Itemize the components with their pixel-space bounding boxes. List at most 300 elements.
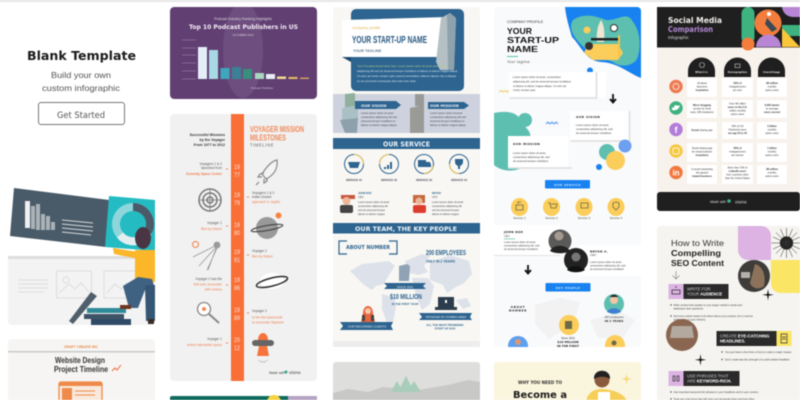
stat: 200 employees: ONLY IN 2 YEARS	[426, 258, 455, 264]
tagline: YOUR TAGLINE	[353, 49, 382, 53]
ribbon: promising	[419, 313, 472, 320]
bullets: keywords: Use important keyword-rich phrases in your headlines and in your content.	[674, 390, 759, 394]
timeline markers	[226, 169, 249, 343]
panel: green card peek	[170, 395, 317, 400]
heading: website design: Project Timeline	[54, 365, 108, 374]
icon: sparkle top	[762, 289, 774, 301]
label: use phrases keyword-rich: ARE KEYWORD-RICH.	[687, 378, 731, 383]
milestone labels: Voyager 1	[207, 221, 222, 225]
button: our service: OUR SERVICE	[554, 183, 581, 187]
milestone labels: Voyager 2	[252, 249, 267, 253]
service labels: Service 2	[545, 216, 558, 220]
service labels: SERVICE 02	[381, 178, 397, 182]
text card: our vision: Lorem ipsum dolor sit amet,	[576, 123, 609, 127]
service labels	[513, 216, 623, 220]
label: write for your audience: YOUR AUDIENCE	[687, 291, 722, 296]
team text: consectetur adipiscing elit	[432, 204, 462, 208]
table text: Social sharing app	[692, 147, 713, 150]
row cells	[687, 78, 787, 184]
service glyphs	[516, 202, 619, 210]
panel: company profile with blobs	[494, 7, 641, 357]
heading: about number: ABOUT	[511, 305, 526, 309]
table text: are age 25 to 34	[728, 132, 747, 135]
person card: bryan: CMO	[590, 253, 596, 257]
table text: 1 billion	[767, 147, 777, 150]
column headers: Users/Usage	[763, 70, 780, 74]
icon: starburst	[772, 228, 800, 258]
bar chart	[182, 40, 309, 90]
icon: magnifier	[198, 302, 219, 323]
arrow: down second	[525, 265, 531, 274]
stat: since: Since 2011	[561, 336, 575, 340]
table text: Instagrammers	[729, 150, 747, 154]
table text: LinkedIn users	[729, 170, 747, 173]
label: create eye-catching headlines: CREATE EYE-CATCHING	[720, 334, 769, 338]
credit: made with visme	[269, 370, 301, 375]
timeline years: 77	[234, 173, 241, 179]
label: write for your audience: WRITE FOR	[687, 286, 710, 292]
subheading: timeline: TIMELINE	[250, 142, 274, 148]
intro paragraph: ex ea commodo consequat duis aute irure dolor	[357, 79, 416, 83]
intro paragraph: Ut enim ad minim veniam quis nostrud exercitation ullamco laboris nisi ut aliquip	[357, 74, 456, 78]
milestone labels: Voyager 2	[252, 309, 267, 313]
table text: every second	[764, 111, 780, 114]
button: key people: KEY PEOPLE	[556, 286, 580, 290]
vision text: consectetur adipiscing elit sed	[361, 115, 397, 119]
text card: our mission	[508, 136, 572, 168]
icon: satellite	[192, 242, 220, 270]
mission text: consectetur adipiscing elit sed	[430, 115, 466, 119]
team text: BRYAN	[432, 191, 441, 195]
table text: service for short	[693, 108, 711, 110]
subheading: infographic: Infographic	[668, 35, 689, 40]
heading: compelling seo content: SEO Content	[671, 259, 724, 268]
blue blob	[565, 7, 641, 78]
table text: Social sharing app	[691, 129, 713, 132]
milestone labels: flies by Saturn	[201, 227, 222, 231]
panel: how to write seo content	[657, 226, 800, 400]
text card: our mission: do eiusmod tempor incididunt	[513, 159, 548, 163]
table text: Facebook users	[729, 128, 747, 132]
bullets: audience: addresses their questions.	[674, 306, 704, 310]
milestone labels: enters interstellar space	[187, 343, 222, 347]
milestone labels: with Uranus	[205, 288, 222, 292]
bullets: headlines: Don't underrate the strength of a well-crafted headline!	[725, 358, 790, 362]
team text: sed do eiusmod tempor	[432, 208, 459, 212]
milestone labels: Voyagers 1 & 2	[252, 191, 275, 195]
label: company profile: COMPANY PROFILE	[507, 20, 544, 24]
heading: comparison: Comparison	[668, 25, 713, 34]
table text: are women	[731, 154, 744, 157]
icon: woman	[361, 306, 375, 322]
icon: skyscraper	[436, 13, 456, 70]
footer band	[333, 341, 480, 347]
credit: made with visme: Made with	[269, 371, 285, 375]
table text: More than 70% of	[728, 166, 748, 170]
illustration: person lifting chart panel	[8, 188, 155, 325]
person card: bryan: BRYAN A.	[590, 250, 608, 254]
shape: lilac	[738, 226, 771, 260]
panel: social media comparison	[657, 7, 800, 211]
timeline years: 19	[234, 250, 241, 256]
bullets: audience: of the value to your industry.	[674, 318, 706, 322]
button: key people	[546, 283, 590, 292]
wave: blue	[546, 122, 558, 124]
table text: than the United States	[725, 177, 751, 180]
person card: bryan: Lorem ipsum dolor sit amet,	[590, 260, 622, 264]
tree line	[333, 380, 480, 400]
intro text: by the Voyager	[200, 138, 226, 142]
heading: your start-up name	[507, 26, 560, 54]
band: our service: OUR SERVICE	[383, 140, 430, 148]
table text: All about	[697, 82, 707, 85]
table text: discovery	[697, 86, 708, 88]
bullets: headlines	[721, 350, 792, 362]
label: craft create: CRAFT CREATE INC	[64, 345, 98, 349]
subtitle	[42, 70, 121, 93]
panel: voyager mission timeline	[170, 114, 317, 381]
timeline years: 12	[234, 346, 241, 352]
photo: round laptop	[666, 319, 698, 351]
timeline years: 19	[234, 223, 241, 229]
band: our team: OUR TEAM, THE KEY PEOPLE	[355, 225, 457, 233]
heading: voyager mission milestones	[250, 124, 304, 142]
milestone labels: Kennedy Space Center	[186, 172, 223, 176]
label: write for your audience	[668, 284, 728, 299]
circles cluster	[596, 140, 632, 170]
timeline years: 80	[234, 231, 241, 237]
dot	[587, 68, 593, 74]
heading: compelling seo content	[671, 249, 724, 268]
bullets: headlines: You just have a few lines of text to make a major impact.	[725, 350, 792, 354]
team text: CEO	[358, 195, 364, 199]
person card: john doe: consectetur adipiscing elit, sed	[504, 244, 540, 248]
heading: why you need to: WHY YOU NEED TO	[518, 380, 563, 385]
label: use phrases keyword-rich: USE PHRASES THAT	[687, 374, 729, 378]
panel: website design project timeline card	[8, 339, 155, 400]
person card: john doe	[494, 230, 560, 256]
heading: blank template: Blank Template	[27, 48, 136, 63]
icon: concentric target	[199, 189, 221, 211]
mission text	[430, 111, 466, 127]
intro text: From 1977 to 2012	[194, 143, 225, 147]
team text: JOHN DOE	[358, 191, 372, 195]
icon: building on map	[399, 264, 410, 281]
heading: about number	[339, 241, 397, 254]
table text: monthly	[768, 150, 777, 154]
table text: from countries other	[726, 174, 749, 176]
timeline years	[234, 165, 241, 352]
small label: Podcast Industry Ranking Highlights	[214, 17, 272, 21]
band: our team	[333, 223, 480, 234]
panel: become a card	[494, 362, 641, 400]
team text: labore et dolore magna	[358, 212, 385, 216]
table text: active users	[765, 175, 779, 178]
icon: rocket	[256, 160, 277, 185]
eyebrow text: company profile	[352, 25, 381, 30]
heading: voyager mission milestones: MILESTONES	[250, 132, 286, 142]
icons: social networks: in	[672, 168, 680, 178]
text card: intro: minim veniam quis.	[513, 88, 536, 92]
bullets: audience: Not every article needs to be direct about your product, but it must be	[674, 314, 753, 318]
orange timeline bar	[231, 114, 244, 381]
heading: your start-up name: NAME	[507, 44, 539, 54]
milestone labels: first ever encounter	[194, 282, 223, 286]
icons: social networks: f	[674, 125, 678, 135]
label: create eye-catching headlines	[716, 331, 792, 346]
blob: building yellow	[559, 315, 579, 335]
icon: ufo	[252, 333, 274, 362]
team text	[358, 191, 464, 216]
milestone labels: to encounter Neptune	[252, 320, 284, 324]
icon: laptop	[435, 297, 457, 310]
person card: bryan: do eiusmod tempor incididunt	[590, 267, 624, 271]
intro paragraph: adipiscing elit sed do eiusmod tempor incididunt ut labore et dolore magna aliqua	[357, 69, 458, 73]
service labels: SERVICE 03	[416, 178, 432, 182]
text card: intro	[509, 72, 606, 98]
milestone labels: Voyager 1	[207, 337, 222, 341]
table text: 3 billion	[767, 125, 777, 128]
stat caption: IN THE FIRST YEAR	[392, 302, 418, 306]
dark footer	[657, 192, 800, 211]
panel: blank template card	[8, 50, 156, 326]
table text: 34% of US	[732, 125, 744, 128]
intro text: Successful Missions	[190, 133, 225, 137]
timeline years: 20	[234, 338, 241, 344]
service labels: Service 4	[610, 216, 623, 220]
promising caption: START UP 2015	[435, 326, 456, 330]
service labels: Service 1	[513, 216, 526, 220]
button: our service	[545, 180, 590, 188]
arrow: down	[672, 271, 680, 279]
heading: top 10 podcast publishers: Top 10 Podcast Publishers in US	[189, 24, 298, 31]
credit: made with visme: visme	[735, 200, 747, 204]
table text: site geared	[696, 172, 709, 174]
illustration: rocket and tools	[584, 20, 623, 60]
team text: CFO	[432, 195, 437, 199]
icon: stacked building	[340, 93, 358, 133]
milestone labels	[186, 162, 284, 347]
blob: blue person	[508, 336, 528, 356]
stat: employees	[605, 315, 624, 323]
band: our service	[333, 138, 480, 149]
heading: your start-up name: YOUR	[507, 26, 532, 36]
table text: inspiration	[696, 154, 709, 157]
text card: our vision: do eiusmod tempor incididunt	[576, 131, 611, 135]
table text: Micro blogging	[693, 104, 711, 107]
panel: forest template card	[333, 362, 480, 400]
icon: white ringed planet	[256, 273, 288, 290]
table text: users in the U.S.	[728, 106, 748, 109]
team text: Lorem ipsum dolor sit amet	[432, 200, 464, 204]
team portraits	[340, 195, 426, 213]
table text: 50% of	[733, 82, 742, 85]
ribbon: since	[384, 283, 426, 289]
vision text: eiusmod tempor incididunt ut	[361, 119, 396, 123]
geometric shapes	[742, 7, 800, 50]
table text: A social networking	[691, 168, 713, 171]
stat: employees: 200 employees	[605, 315, 624, 319]
promising caption: ALL THE MOST PROMISING	[426, 323, 464, 327]
milestone labels: is the first spacecraft	[252, 316, 282, 320]
mission text: eiusmod tempor incididunt ut	[430, 119, 465, 123]
arrow label: our vision	[355, 101, 401, 109]
table text: Instagrammers	[729, 86, 747, 88]
bar chart: Podcast Publisher	[251, 86, 273, 90]
team text: Lorem ipsum dolor sit amet	[358, 200, 390, 204]
stat: employees: IN 2 YEARS	[605, 319, 623, 323]
timeline years: 19	[234, 193, 241, 199]
column headers: What it is	[695, 70, 708, 74]
icon: gray tower	[410, 94, 424, 133]
text card: our vision	[570, 111, 630, 141]
icon: ringed planet with moon	[251, 212, 283, 239]
arrow label: our mission: OUR MISSION	[430, 103, 459, 108]
table text: for visual products	[692, 150, 713, 154]
table text: on average	[766, 108, 779, 110]
label: use phrases keyword-rich	[668, 371, 740, 386]
blob: yellow award	[605, 335, 625, 357]
icon: trees	[391, 376, 421, 392]
table text: 2B million	[766, 82, 778, 85]
subtitle: Build your own	[51, 70, 111, 80]
text card: our vision: consectetur adipiscing elit, sed	[576, 127, 613, 131]
wave	[499, 90, 511, 92]
bullets: audience: Write content that speaks to your target market's needs and	[674, 303, 743, 307]
stat: since: IN THE FIRST	[557, 344, 580, 348]
icon: sparkle	[622, 374, 632, 384]
heading: website design: Website Design	[55, 356, 105, 365]
teal blob	[571, 16, 640, 66]
white title banner	[342, 17, 447, 57]
blue header panel	[351, 9, 464, 91]
milestone labels: flies by Saturn	[252, 254, 273, 258]
text card: our vision: OUR VISION	[576, 115, 600, 119]
text card: intro: adipiscing elit, sed do eiusmod tempor incididunt	[513, 80, 571, 84]
vision text: labore et dolore magna aliqua	[361, 123, 397, 127]
text card: our mission: consectetur adipiscing elit, sed	[513, 155, 550, 159]
photo: round top	[738, 260, 770, 292]
photo: smiling person	[586, 371, 627, 400]
button: get started: Get Started	[57, 111, 105, 121]
table text: inspiration	[696, 89, 709, 92]
service labels: SERVICE 04	[451, 178, 467, 182]
tagline: Your tagline	[507, 60, 530, 64]
subtitle: custom infographic	[42, 83, 121, 93]
vision text: Lorem ipsum dolor sit amet	[361, 111, 394, 115]
date label: OCTOBER 2019	[233, 33, 254, 37]
timeline years: 19	[234, 308, 241, 314]
column headers: Demographics	[728, 70, 748, 74]
table text: are men	[733, 89, 743, 92]
table text: 50% of	[733, 147, 742, 150]
milestone labels: Voyagers 1 & 2	[200, 162, 222, 166]
milestone labels: launched from	[201, 166, 222, 170]
person card: john doe: JOHN DOE	[503, 230, 523, 234]
shape: yellow	[771, 260, 800, 293]
milestone labels: Voyager 2 has the	[195, 277, 222, 281]
heading: website design	[54, 356, 108, 374]
timeline years: 89	[234, 316, 241, 322]
team text: sed do eiusmod tempor	[358, 208, 385, 212]
heading: about number: NUMBER	[509, 308, 527, 312]
person card: john doe: do eiusmod tempor incididunt	[504, 247, 538, 251]
intro paragraph	[357, 64, 458, 83]
stat: 10 million: $10 MILLION	[390, 294, 422, 301]
panel: podcast publishers chart	[170, 2, 317, 99]
vision text	[361, 111, 397, 127]
heading: social media: Social Media	[668, 16, 722, 25]
table text: 6,000 tweets	[765, 104, 780, 107]
icon: sparkle middle	[695, 354, 706, 366]
ribbon: since: SINCE 2011	[397, 285, 414, 289]
person card: bryan	[590, 250, 626, 271]
stat: 200 employees	[426, 250, 466, 264]
label: create eye-catching headlines: HEADLINES.	[720, 338, 745, 343]
portrait: john	[548, 230, 572, 253]
icon: trend line	[112, 365, 121, 371]
table text: million monthly	[729, 110, 747, 112]
icon: browser windows	[59, 382, 102, 400]
table text: monthly	[768, 86, 777, 88]
heading: your start-up name: START-UP	[507, 35, 560, 45]
mission text: Lorem ipsum dolor sit amet	[430, 111, 463, 115]
timeline years: 19	[234, 165, 241, 171]
text card: our mission: Lorem ipsum dolor sit amet,	[513, 151, 546, 155]
service icons	[344, 154, 468, 174]
milestone labels: make closest	[252, 195, 271, 199]
milestone labels: approach to Jupiter	[252, 200, 281, 204]
timeline years: 86	[234, 286, 241, 292]
heading: compelling seo content: Compelling	[671, 249, 721, 258]
icons: social networks	[669, 80, 683, 179]
person blob: teal	[604, 294, 624, 314]
heading: your start-up name: YOUR START-UP NAME	[352, 35, 427, 46]
stat: since	[557, 336, 580, 348]
table text: texts, 280 characters	[690, 111, 714, 114]
person card: john doe: CEO	[504, 234, 510, 238]
credit: made with visme: Made with	[710, 200, 726, 204]
heading: voyager mission milestones: VOYAGER MISSION	[250, 124, 304, 134]
bullets: keywords	[670, 390, 759, 400]
ribbon: clients	[340, 322, 393, 330]
team text: consectetur adipiscing elit	[358, 204, 388, 208]
table text: active users	[765, 132, 779, 135]
heading: about number: ABOUT NUMBER	[346, 245, 390, 251]
table text: active users	[765, 154, 779, 157]
text card: intro: ut labore et dolore magna aliqua. Ut enim ad	[513, 84, 567, 88]
mission text: labore et dolore magna aliqua	[430, 123, 466, 127]
teal blob: left	[494, 112, 530, 171]
table text: toward business	[692, 175, 712, 178]
ribbon: clients: OUR RECORDED CLIENTS	[348, 324, 386, 328]
top divider	[0, 0, 800, 2]
portrait: bryan	[564, 248, 588, 272]
table text: 2B million	[766, 168, 778, 171]
table text: active users	[765, 89, 779, 92]
map shade	[535, 298, 635, 339]
timeline years: 19	[234, 278, 241, 284]
text card: intro: Lorem ipsum dolor sit amet, consectetur	[513, 75, 561, 79]
table text: active users	[731, 113, 745, 116]
arrow: down	[610, 94, 616, 102]
credit: made with visme: visme	[289, 370, 301, 375]
person card: john doe: Lorem ipsum dolor sit amet,	[504, 240, 536, 244]
stat: 200 employees: 200 EMPLOYEES	[426, 250, 466, 257]
service labels: SERVICE 01	[346, 178, 362, 182]
intro paragraph: Your Company brand story here. Lorem ipsum dolor sit amet consectetur	[357, 64, 447, 68]
stat: since: $10 MILLION	[557, 340, 579, 344]
